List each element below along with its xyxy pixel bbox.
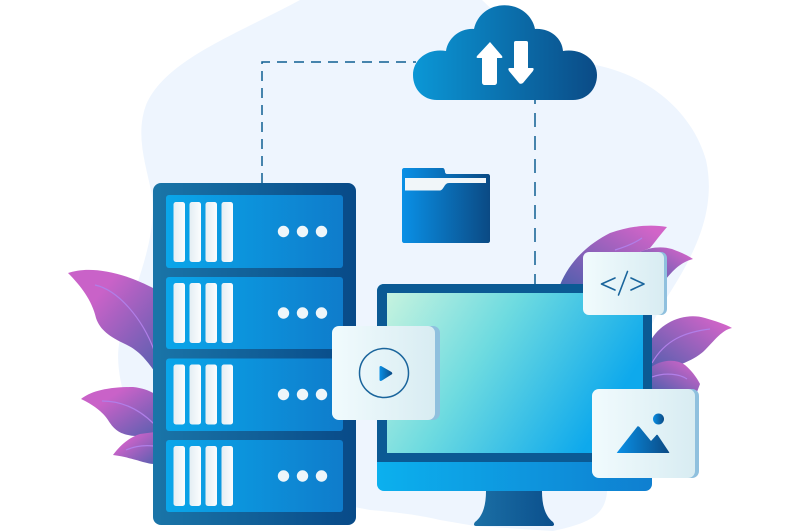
- leaf: top right large: [560, 226, 667, 290]
- monitor: [377, 284, 652, 526]
- code icon: [602, 272, 644, 295]
- server unit 2: [166, 277, 343, 349]
- leaf: large left: [68, 270, 155, 372]
- code card: [583, 252, 667, 315]
- left leaves: [68, 270, 155, 464]
- server unit 4: [166, 440, 343, 512]
- leaf: small left: [113, 432, 155, 464]
- dashed connector: server to cloud: [262, 62, 416, 183]
- monitor stand: [474, 491, 554, 526]
- image card: [592, 389, 699, 478]
- arrow up: [477, 42, 502, 85]
- right leaves: [560, 226, 732, 392]
- server rack: [153, 183, 356, 525]
- dashed connector: cloud to monitor: [534, 100, 536, 284]
- arrow down: [508, 41, 534, 84]
- server unit 1: [166, 195, 343, 268]
- play icon: [360, 348, 408, 398]
- leaf: right middle: [650, 316, 732, 376]
- video card: [332, 326, 440, 420]
- leaf: middle left: [81, 387, 155, 436]
- server unit 3: [166, 358, 343, 431]
- cloud icon: [413, 5, 597, 100]
- monitor screen: [387, 293, 643, 453]
- image icon: mountains and sun: [617, 414, 669, 453]
- leaf: top right small: [640, 247, 693, 282]
- background blob: [118, 0, 709, 531]
- leaf: right lower: [650, 361, 700, 392]
- folder icon: [402, 168, 490, 243]
- monitor body: [377, 284, 652, 491]
